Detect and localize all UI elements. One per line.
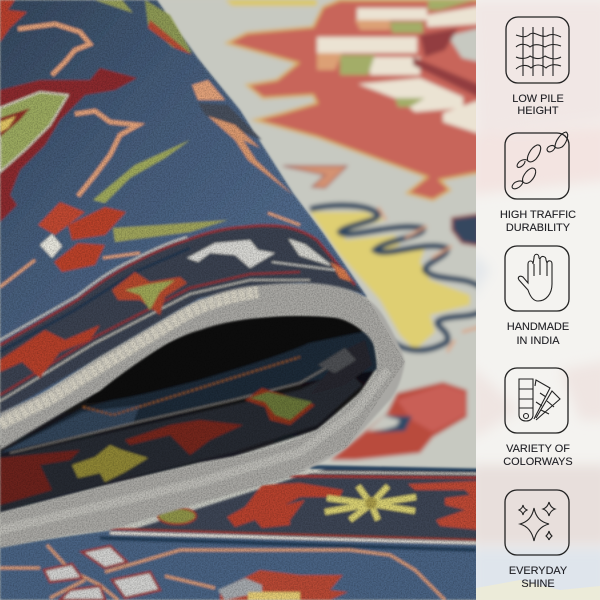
red medallion [227,0,500,200]
underside red motifs [0,388,315,505]
rolled rug top surface [0,0,367,420]
feature: everyday shine [505,490,569,590]
label: LOW PILE [512,93,564,105]
red meander left [227,483,343,528]
top left red motif [0,0,27,42]
dark border band [0,226,363,415]
green leaf two [113,220,228,242]
icon: hand [505,246,569,311]
underside blue strip [30,331,378,438]
feature: variety of colorways: COLORWAYS [503,456,573,468]
green leaf motif [158,508,196,524]
icon: swatch fan [505,368,568,433]
floor rug background [224,0,476,462]
lower border band [132,464,476,543]
label: VARIETY OF [506,443,570,455]
dark red medallion [0,68,137,222]
red flower motif [38,202,126,272]
green band motif [112,272,187,315]
white squiggle [187,240,275,268]
cream cord [0,292,258,424]
feature: handmade in india [505,246,569,347]
red floor motif [330,382,467,460]
pile texture overlay [0,0,476,600]
feature: high traffic durability: DURABILITY [506,222,571,234]
orange dotted line [83,357,300,415]
label: HANDMADE [507,321,569,333]
label: HIGH TRAFFIC [500,209,576,221]
white binding lip [0,283,405,548]
yellow star motif [325,486,416,520]
navy square motif [452,214,480,246]
feature: everyday shine: SHINE [521,578,555,590]
white flower motif [44,546,160,600]
icon: sparkles [505,490,569,555]
icon: pile weave [506,17,569,83]
top edge motifs [95,0,133,13]
lower blue field [0,529,500,600]
feature: high traffic durability [500,132,576,234]
peach lattice lines [0,545,445,600]
red band motif [0,325,100,378]
white side panel [470,0,600,600]
label: EVERYDAY [509,565,568,577]
feature: handmade in india: IN INDIA [517,335,560,347]
peach zigzag [18,24,90,75]
underside grey patch [310,340,372,395]
small peach strokes [0,213,300,287]
underside dark opening [0,315,378,513]
peach outline [378,207,480,352]
icon: footprints [505,132,569,199]
underside yellow star [72,445,148,482]
yellow motif [310,212,470,350]
red and yellow flower motif [218,570,348,600]
lip highlight [0,370,388,530]
green leaf one [93,140,190,203]
feature: variety of colorways [503,368,573,468]
underside dark border [10,378,363,476]
peach corner [330,262,352,282]
top yellow strip [225,0,317,6]
small peach motif [283,166,347,188]
feature: low pile height: HEIGHT [517,105,559,117]
navy outline motif [310,205,480,350]
peach zigzag two [75,111,138,196]
right edge motif [192,80,293,195]
red meander right [408,481,480,530]
feature: low pile height [506,17,569,117]
white thin line [10,360,340,453]
